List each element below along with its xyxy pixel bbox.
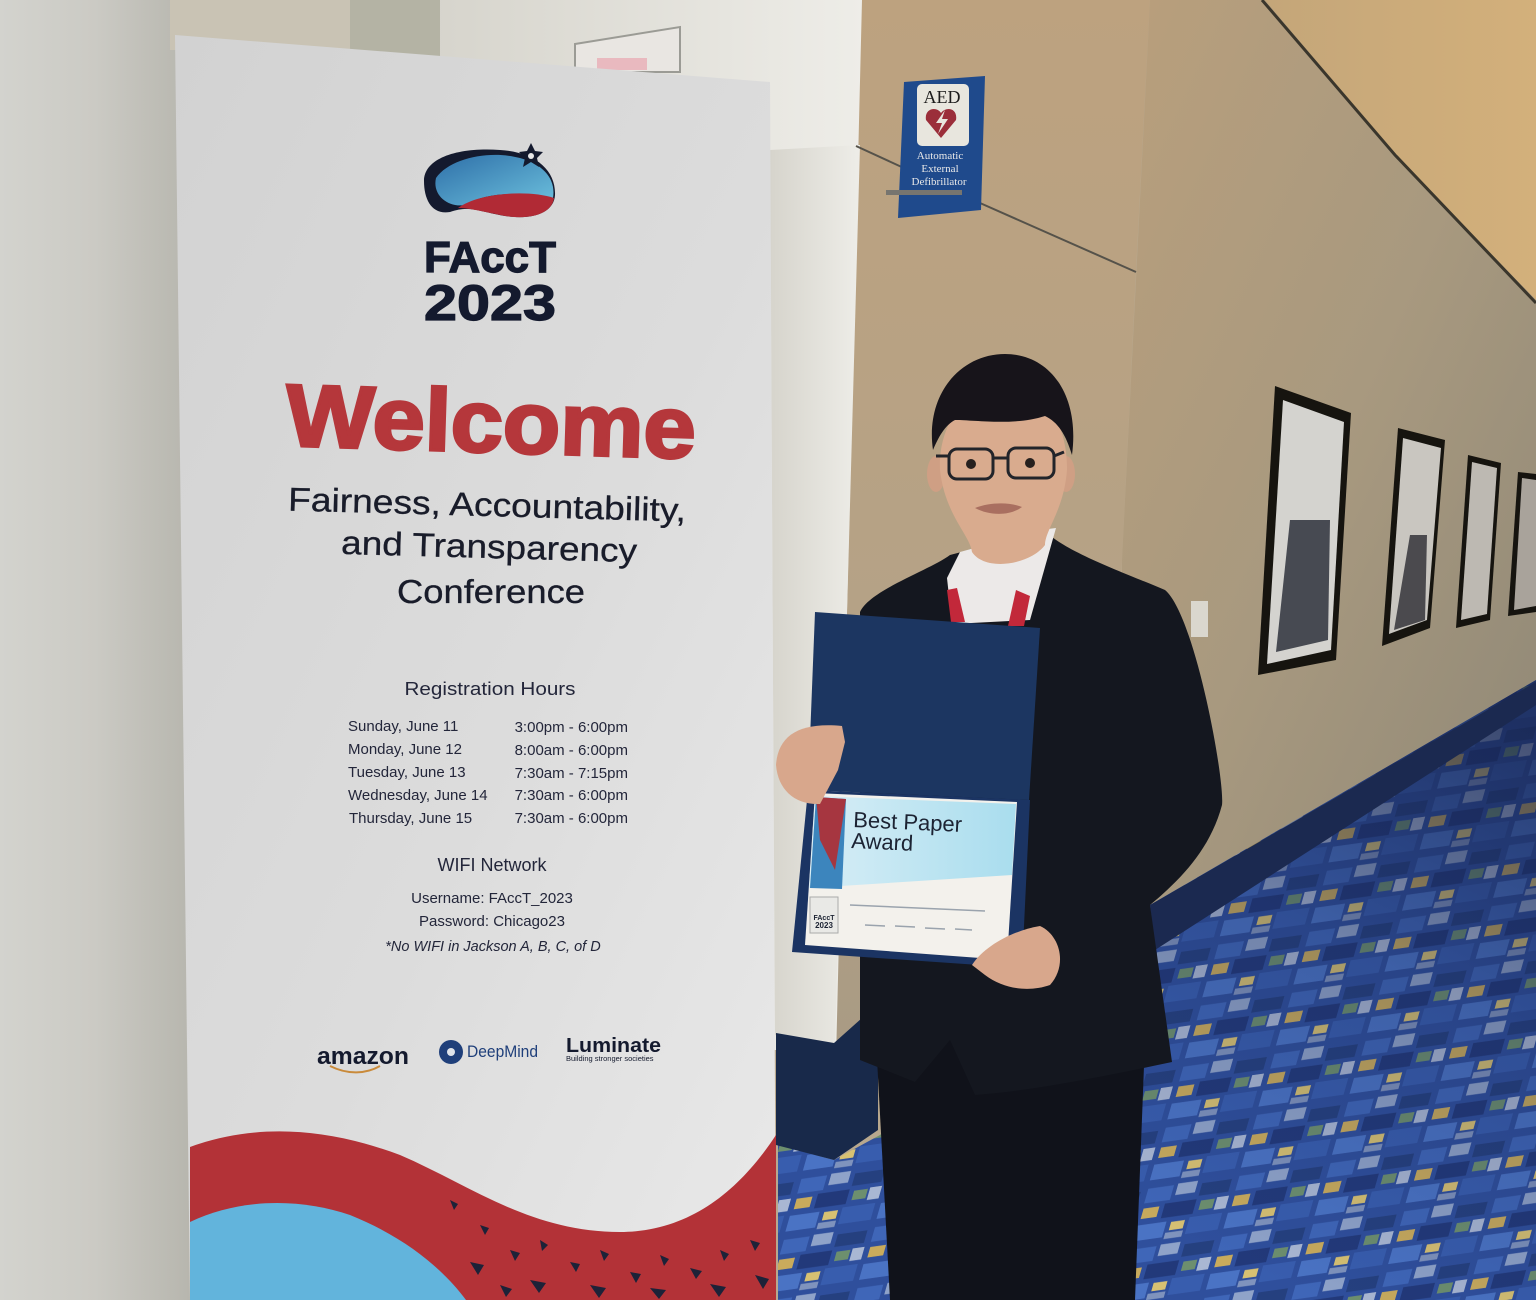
sign on far wall <box>575 27 680 72</box>
AED sign: Defibrillator <box>912 176 967 188</box>
banner FAccT 2023 wordmark: FAccT <box>424 233 556 282</box>
award folder cover <box>808 612 1040 800</box>
person: right hand <box>972 926 1060 989</box>
conference name: Fairness, Accountability, <box>288 480 687 529</box>
sponsor logos: Luminate <box>566 1035 661 1057</box>
registration hours <box>348 679 628 827</box>
tan wall: near section <box>835 0 1150 1100</box>
AED sign <box>886 76 985 218</box>
wall switch <box>1191 601 1208 637</box>
left column <box>0 0 190 1300</box>
person: facial features <box>966 458 1035 514</box>
sponsor logos <box>317 1035 661 1072</box>
framed picture 4 <box>1508 472 1536 616</box>
wifi network: Username: FAccT_2023 <box>411 890 573 907</box>
framed picture 1 <box>1258 386 1351 675</box>
award certificate <box>805 793 1017 960</box>
registration hours: Thursday, June 15 <box>349 810 472 827</box>
sponsor logos: DeepMind <box>467 1042 538 1061</box>
person: hair <box>932 354 1073 455</box>
registration hours: 7:30am - 6:00pm <box>515 787 628 804</box>
person: ears <box>927 456 1075 492</box>
banner blue wave <box>190 1203 466 1300</box>
conference name: and Transparency <box>341 524 638 569</box>
AED sign: External <box>921 163 959 175</box>
wifi network: Password: Chicago23 <box>419 913 565 930</box>
registration hours: 3:00pm - 6:00pm <box>515 719 628 736</box>
person: glasses <box>936 448 1064 479</box>
tan wall: upper lit band <box>1265 0 1536 300</box>
conference name <box>288 480 687 610</box>
registration hours: Wednesday, June 14 <box>348 787 488 804</box>
award certificate: Best Paper <box>853 807 963 837</box>
registration hours: 7:30am - 6:00pm <box>515 810 628 827</box>
conference name: Conference <box>397 573 585 610</box>
wall rail line <box>856 146 1136 272</box>
banner panel <box>175 35 776 1300</box>
AED sign: Automatic <box>917 150 963 162</box>
framed picture 3 <box>1456 455 1501 628</box>
award certificate: FAccT <box>813 915 835 922</box>
wifi network: *No WIFI in Jackson A, B, C, of D <box>385 939 601 955</box>
framed picture 2 <box>1382 428 1445 646</box>
Welcome heading: Welcome <box>285 366 697 477</box>
person: shirt collar <box>947 528 1056 624</box>
dark base of column <box>776 1000 878 1160</box>
banner logo <box>424 143 555 217</box>
registration hours: Registration Hours <box>404 679 576 699</box>
person: red lanyard <box>947 588 1030 626</box>
carpet shading <box>778 680 1536 1300</box>
person: trousers <box>876 1040 1145 1300</box>
wifi network: WIFI Network <box>437 855 547 875</box>
tan wall: long corridor <box>1122 0 1536 920</box>
banner red wave <box>190 1131 776 1300</box>
background wall: far column top <box>345 0 440 60</box>
registration hours: 8:00am - 6:00pm <box>515 742 628 759</box>
person: left hand <box>776 725 845 804</box>
award certificate: 2023 <box>815 921 833 930</box>
award certificate: Award <box>851 828 914 856</box>
person: neck and face <box>940 385 1067 564</box>
ceiling rail line <box>1262 0 1536 303</box>
award folder lower edge <box>792 790 1030 968</box>
banner FAccT 2023 wordmark: 2023 <box>424 275 556 331</box>
registration hours: 7:30am - 7:15pm <box>515 765 628 782</box>
carpet border near wall <box>1150 682 1536 950</box>
registration hours: Sunday, June 11 <box>348 718 458 735</box>
banner FAccT 2023 wordmark <box>424 233 556 331</box>
sponsor logos: amazon <box>317 1043 409 1070</box>
sponsor logos: Building stronger societies <box>566 1054 654 1063</box>
background wall: white section <box>430 0 865 1050</box>
AED sign: AED <box>924 87 960 107</box>
left column top <box>170 0 350 50</box>
registration hours: Tuesday, June 13 <box>348 764 466 781</box>
banner speckles <box>450 1200 769 1299</box>
white column edge <box>770 145 860 1045</box>
carpet <box>778 680 1536 1300</box>
person: suit jacket <box>860 530 1222 1095</box>
registration hours: Monday, June 12 <box>348 741 462 758</box>
wifi network <box>385 855 601 955</box>
